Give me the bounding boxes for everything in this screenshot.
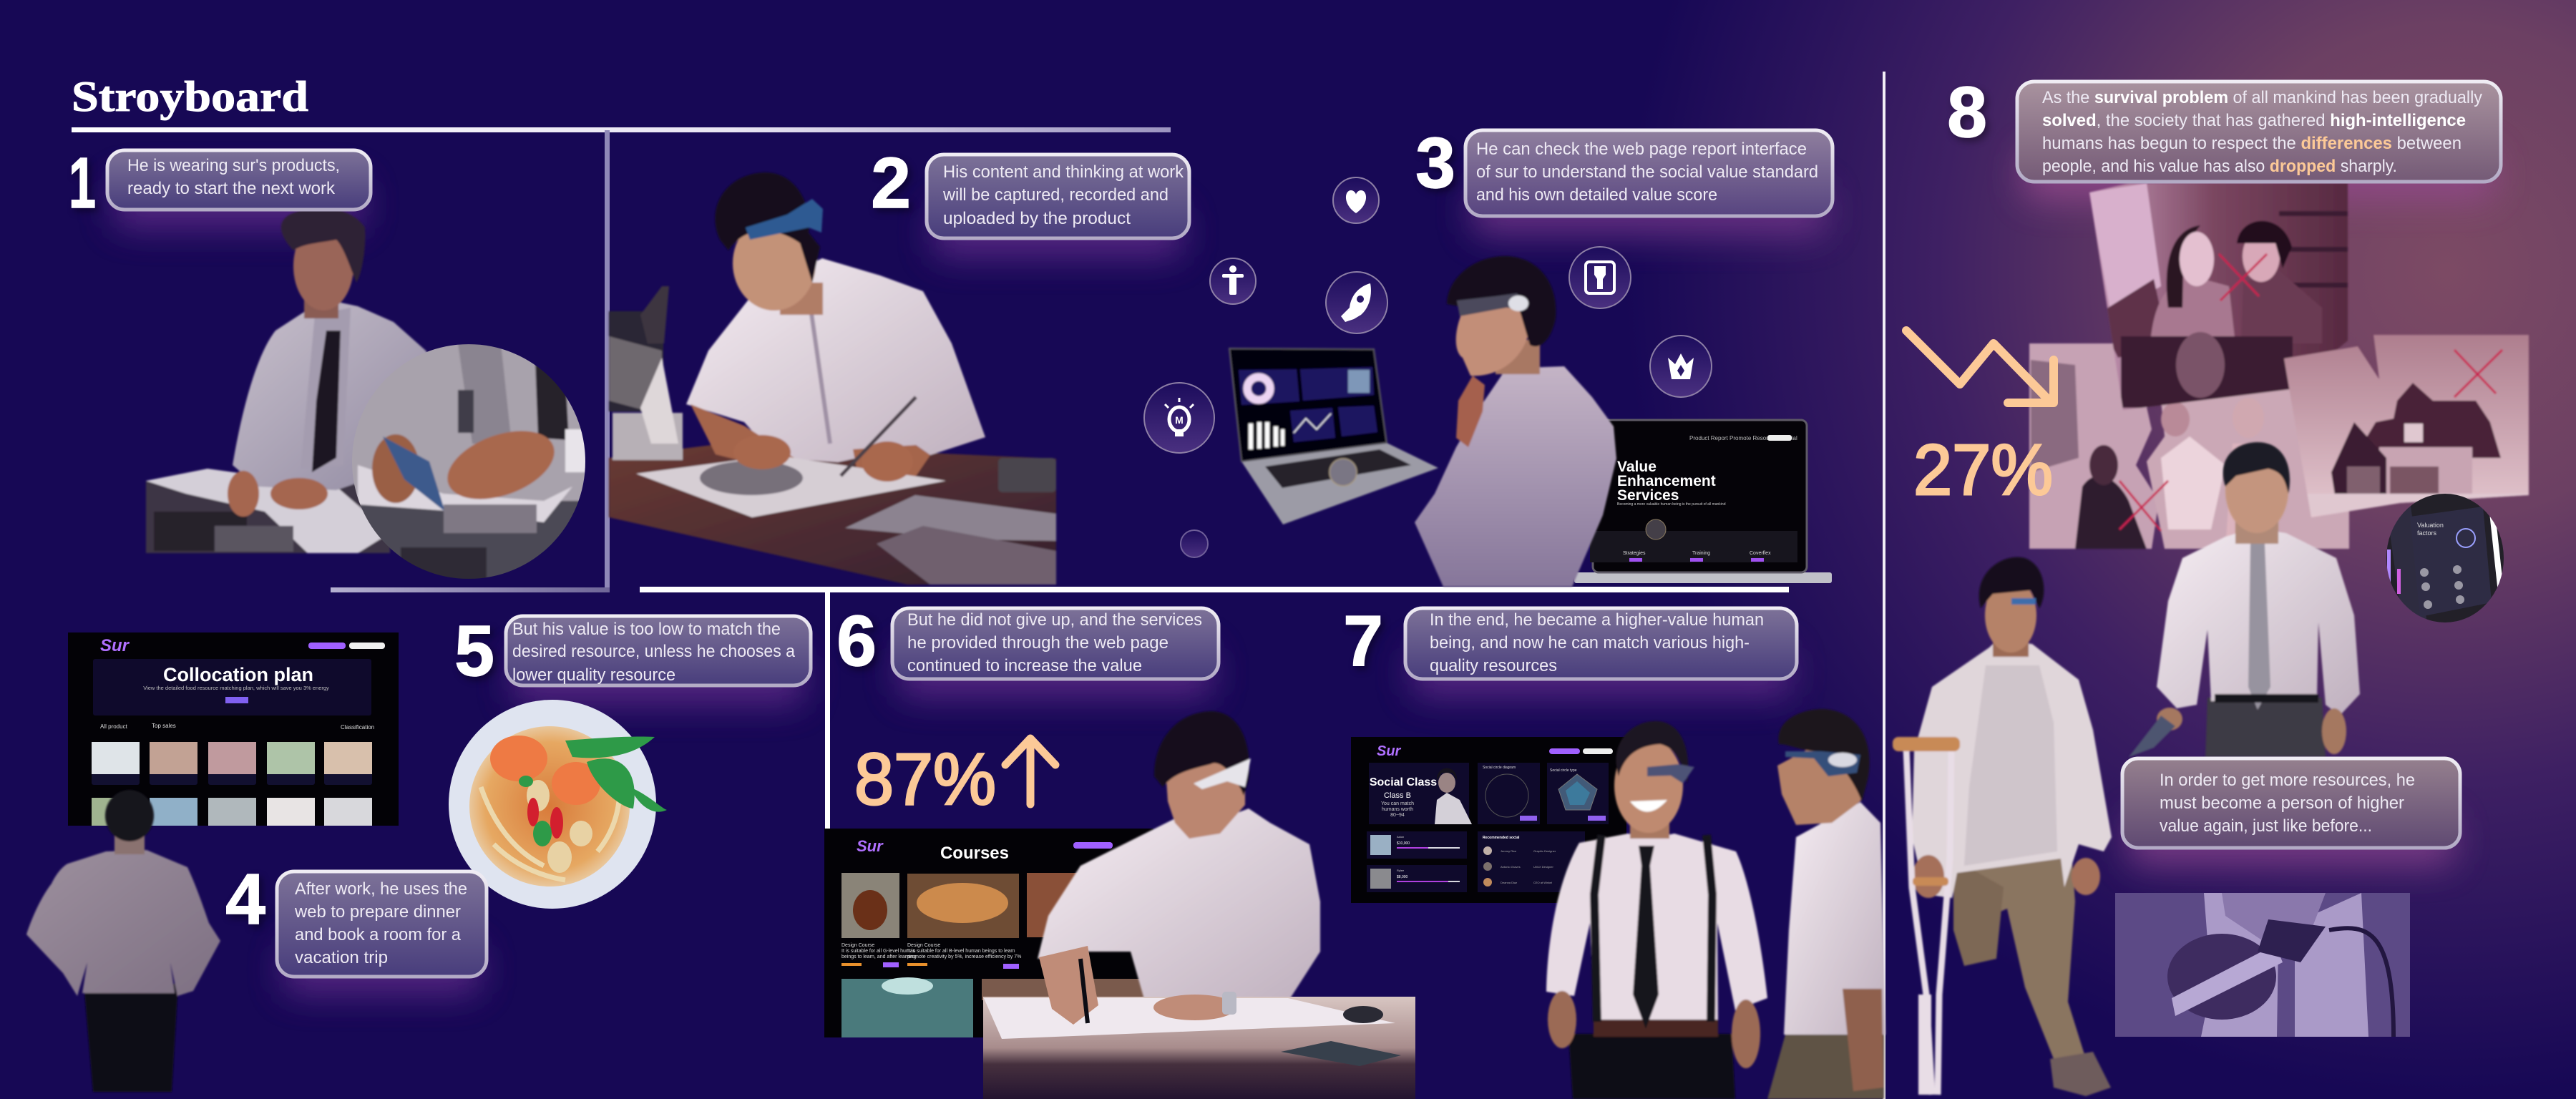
screen: Becoming a more valuable human being is the pursuit of all mankind — [1617, 502, 1726, 507]
caption text: In the end, he became a higher-value human — [1430, 610, 1764, 630]
number: 7 — [1343, 601, 1383, 681]
caption text — [907, 610, 1202, 675]
step 8 — [1947, 72, 2501, 182]
hands — [228, 471, 328, 517]
divider: title rule — [72, 127, 1171, 132]
legs in jeans — [2201, 893, 2368, 1037]
panel 7: second laughing man — [1767, 709, 1885, 1099]
number: 1 — [69, 143, 96, 223]
recommended social: Deanna Diaz — [1501, 881, 1517, 884]
forearm — [1843, 989, 1883, 1091]
tie — [1633, 846, 1659, 1029]
photo: office colleagues — [2029, 343, 2349, 549]
icon: rocket — [1326, 272, 1387, 333]
caption text: humans has begun to respect the differences between — [2042, 134, 2462, 153]
shirt — [1784, 802, 1885, 1035]
caption text: He can check the web page report interface — [1476, 140, 1807, 159]
step 3 — [1415, 123, 1833, 216]
resource rows — [1367, 831, 1467, 892]
photo: house — [2283, 335, 2529, 521]
caption text: As the survival problem of all mankind has been gradually — [2042, 88, 2482, 107]
divider: main horizontal — [640, 587, 1789, 592]
caption text: he provided through the web page — [907, 633, 1169, 653]
soup — [469, 726, 630, 886]
caption text: and book a room for a — [295, 925, 462, 944]
buttons — [1549, 748, 1613, 754]
bubble glows — [113, 150, 2495, 995]
caption text: But he did not give up, and the services — [907, 610, 1202, 630]
head — [1979, 557, 2044, 657]
caption text: In order to get more resources, he — [2160, 771, 2415, 790]
icon: wrench — [1569, 247, 1631, 308]
arms and hands — [1548, 991, 1760, 1068]
caption bubble — [2122, 758, 2460, 848]
screen: Value — [1617, 459, 1657, 475]
icon: person — [1210, 258, 1256, 304]
recommended social: Graphic Designer — [1533, 849, 1556, 853]
photo: couple — [2088, 183, 2348, 411]
head — [1447, 256, 1556, 376]
product in hand — [2129, 715, 2175, 757]
divider: panel 8 vertical — [1883, 72, 1885, 1099]
social class card: Class B — [1384, 791, 1411, 800]
caption text — [1430, 610, 1764, 675]
belt — [2215, 694, 2318, 703]
panel 6: man drawing at desk — [1038, 711, 1320, 1002]
social class card: 80~94 — [1390, 813, 1405, 818]
eggs — [527, 780, 592, 873]
social class card: Social Class — [1370, 776, 1437, 788]
screen: Training — [1692, 551, 1710, 556]
hero card — [93, 659, 371, 715]
divider: panel 6 vertical — [825, 591, 830, 1019]
recommended social: Jeremy Rice — [1501, 849, 1517, 853]
panel 8: down arrow — [1906, 331, 2054, 403]
screen: Services — [1617, 487, 1679, 504]
hands — [1913, 855, 2100, 898]
final caption — [2122, 758, 2460, 848]
recommended social: CEO at Winkel — [1533, 881, 1552, 884]
panel 7: laughing man with suspenders — [1546, 721, 1767, 1099]
panel 8: device circle: factors — [2417, 529, 2437, 537]
icon: small empty circle — [1181, 530, 1208, 557]
social class card — [1369, 763, 1472, 824]
t-shirt — [1964, 665, 2057, 866]
saw — [2167, 934, 2276, 1020]
recommended social: Recommended social — [1483, 836, 1520, 840]
shrimp — [490, 736, 600, 805]
jacket — [233, 301, 445, 490]
logo: Sur — [857, 837, 884, 855]
caption text: continued to increase the value — [907, 656, 1142, 675]
caption text: vacation trip — [295, 948, 388, 967]
missing leg stump — [1953, 859, 2004, 966]
blueprint paper — [984, 998, 1395, 1039]
caption text — [1476, 140, 1818, 205]
caption text — [942, 162, 1184, 228]
caption text: web to prepare dinner — [294, 902, 461, 922]
panel 8: device circle — [2386, 494, 2504, 622]
head — [1777, 709, 1869, 825]
recommended social — [1478, 831, 1585, 892]
course images — [841, 873, 1152, 941]
caption text: and his own detailed value score — [1476, 185, 1717, 205]
course captions: It is suitable for all B-level human beings to learn — [907, 949, 1015, 954]
resource rows: Aston — [1397, 835, 1404, 839]
forearms — [691, 404, 930, 487]
caption text: must become a person of higher — [2160, 793, 2404, 813]
caption text: of sur to understand the social value standard — [1476, 162, 1818, 182]
caption text — [294, 879, 467, 967]
course captions — [841, 943, 1021, 959]
recommended social: Antonio Graves — [1501, 865, 1521, 869]
crutch — [1906, 748, 1951, 1095]
caption text: value again, just like before... — [2160, 816, 2372, 836]
suspenders — [1594, 835, 1712, 1022]
radar chart: Social circle type — [1550, 768, 1577, 773]
screen: Enhancement — [1617, 473, 1716, 489]
caption bubble — [927, 155, 1189, 238]
caption bubble — [277, 871, 487, 977]
base — [1574, 572, 1832, 583]
caption text: lower quality resource — [512, 665, 675, 685]
panel 3: right laptop — [1574, 420, 1832, 583]
title: Stroyboard — [72, 73, 308, 120]
panel 3: man thinking — [1415, 256, 1616, 587]
belt — [1594, 1020, 1718, 1037]
icon: heart — [1333, 177, 1379, 223]
head — [1614, 721, 1694, 839]
circle diagram: Social circle diagram — [1483, 766, 1516, 770]
course captions: promote creativity by 5%, increase efficiency by 7% — [907, 954, 1021, 959]
step 1 — [69, 143, 371, 223]
resource rows: Rylee — [1397, 869, 1405, 872]
red crosses — [2119, 254, 2502, 531]
caption text: solved, the society that has gathered high-intelligence — [2042, 111, 2466, 130]
laptop base — [1241, 443, 1438, 524]
panel 8: collage — [2029, 179, 2529, 549]
caption text: people, and his value has also dropped sharply. — [2042, 157, 2397, 176]
shoe — [2050, 1052, 2111, 1096]
arm and hand — [1456, 376, 1485, 447]
panel 8: device circle: Valuation — [2417, 522, 2444, 529]
power cord — [2329, 928, 2394, 1037]
paper with sketch — [636, 455, 946, 517]
shirt — [2157, 528, 2360, 715]
social class card: You can match — [1381, 801, 1414, 806]
shirt — [1415, 366, 1616, 587]
left forearm — [1039, 946, 1098, 1025]
icon: crown — [1650, 336, 1712, 397]
course captions: Design Course — [907, 943, 940, 948]
tabs: Top sales — [152, 723, 176, 729]
step 7 — [1343, 601, 1797, 681]
course captions: It is suitable for all G-level human — [841, 949, 916, 954]
panel 8: man with crutch — [1893, 557, 2112, 1096]
caption text — [512, 620, 796, 685]
panel 5: soup bowl — [449, 700, 667, 909]
ratings and buttons — [841, 962, 1019, 969]
number: 6 — [836, 601, 877, 681]
shirt — [1546, 834, 1767, 1025]
radar chart — [1547, 763, 1609, 824]
laptop screen — [1229, 348, 1387, 461]
number: 3 — [1415, 123, 1455, 203]
panel 7: social class web page — [1351, 737, 1626, 903]
screen: Coverflex — [1750, 551, 1771, 556]
panel 8: circular saw photo — [2115, 893, 2410, 1037]
tie — [2248, 544, 2270, 710]
head — [105, 790, 154, 854]
shirt fold — [809, 293, 830, 444]
head — [1154, 711, 1251, 839]
caption bubble — [1405, 608, 1797, 679]
head — [2223, 442, 2290, 544]
resource rows: $8,000 — [1397, 875, 1408, 879]
screen: Product Report Promote Resources Social — [1689, 435, 1797, 441]
hand on paper — [733, 435, 791, 469]
icon: bulb: M — [1175, 414, 1184, 426]
caption text: He is wearing sur's products, — [127, 156, 340, 175]
step 5 — [454, 611, 811, 691]
jacket — [1912, 640, 2112, 898]
caption text — [2042, 88, 2482, 176]
shirt — [686, 258, 985, 462]
caption text: being, and now he can match various high- — [1430, 633, 1750, 653]
tablet — [1281, 1041, 1401, 1066]
right hand and watch — [1153, 992, 1236, 1020]
logo: Sur — [100, 636, 130, 655]
trousers — [1568, 1034, 1735, 1099]
panel 8: man head down holding product — [2129, 442, 2360, 757]
number: 5 — [454, 611, 494, 691]
heading: Courses — [940, 844, 1009, 863]
resource rows: $10,000 — [1397, 841, 1410, 846]
back button — [1073, 842, 1113, 849]
pencil hand — [841, 397, 916, 482]
panel 1: man in suit at desk — [146, 207, 445, 553]
trousers — [1957, 851, 2086, 1059]
divider: panel 1 frame — [331, 130, 610, 592]
buttons — [308, 643, 385, 649]
recommended social: UI/UX Designer — [1533, 865, 1553, 869]
caption bubble — [1465, 130, 1833, 216]
crutch handles — [1893, 737, 1960, 886]
panel 3: floating icons — [1144, 177, 1712, 557]
caption bubble — [2017, 82, 2501, 182]
icon: bulb — [1144, 383, 1214, 453]
caption text: But his value is too low to match the — [512, 620, 781, 639]
desk — [146, 469, 390, 553]
trousers — [1767, 1035, 1884, 1099]
caption text: ready to start the next work — [127, 179, 336, 198]
caption text — [2160, 771, 2415, 836]
caption text: uploaded by the product — [943, 209, 1131, 228]
caption text: quality resources — [1430, 656, 1557, 675]
caption text — [127, 156, 340, 198]
chili — [527, 798, 563, 839]
caption text: will be captured, recorded and — [942, 185, 1169, 205]
shirt and tie — [301, 308, 351, 472]
head — [715, 172, 823, 315]
hands — [2222, 893, 2326, 944]
caption text: After work, he uses the — [295, 879, 467, 899]
panel 3: left laptop — [1229, 348, 1438, 524]
panel 1: zoom circle — [351, 343, 587, 580]
hands — [2157, 708, 2346, 754]
sketchbooks — [845, 458, 1056, 585]
tabs: All product — [100, 723, 128, 730]
step 6 — [836, 601, 1219, 681]
desk — [609, 444, 1056, 585]
tabs: Classification — [341, 724, 374, 731]
hero card: View the detailed food resource matching plan, which will save you 3% energy — [143, 685, 329, 691]
panel 6: desk — [983, 946, 1415, 1099]
number: 4 — [225, 859, 265, 939]
screen: Strategies — [1623, 551, 1646, 556]
shirt — [1038, 809, 1320, 1002]
hero card: Collocation plan — [163, 664, 313, 685]
shirt — [26, 850, 220, 996]
step 2 — [871, 143, 1189, 238]
head — [281, 207, 365, 318]
pen holders — [609, 286, 683, 460]
caption bubble — [107, 150, 371, 210]
tabs — [100, 723, 374, 731]
product cards — [92, 742, 372, 826]
panel 4: web page collocation plan — [68, 632, 399, 826]
noodles — [481, 787, 619, 880]
caption bubble — [506, 616, 811, 685]
course captions: Design Course — [841, 943, 874, 948]
course captions: beings to learn, and after learning — [841, 954, 916, 959]
lower images — [841, 977, 1149, 1037]
trousers — [84, 984, 178, 1092]
social class card: humans worth — [1382, 807, 1413, 812]
trousers — [2205, 698, 2326, 757]
panel 6: up arrow — [1005, 738, 1055, 804]
panel 4: man from behind — [26, 790, 220, 1092]
goggles — [1343, 1006, 1383, 1023]
circle diagram — [1478, 763, 1540, 824]
panel 6: courses web page — [824, 829, 1153, 1037]
panel 8: big number: 27% — [1913, 430, 2053, 510]
pen — [1080, 959, 1088, 1023]
herbs — [519, 736, 667, 846]
number: 8 — [1947, 72, 1987, 152]
panel 2: man sketching at desk — [609, 172, 1056, 585]
caption text: desired resource, unless he chooses a — [512, 642, 796, 661]
step 4 — [225, 859, 487, 977]
caption bubble — [892, 608, 1219, 679]
number: 2 — [871, 143, 911, 223]
caption text: His content and thinking at work — [943, 162, 1184, 182]
panel 6: big number: 87% — [854, 738, 996, 820]
screen — [1590, 420, 1807, 572]
logo: Sur — [1377, 743, 1402, 759]
